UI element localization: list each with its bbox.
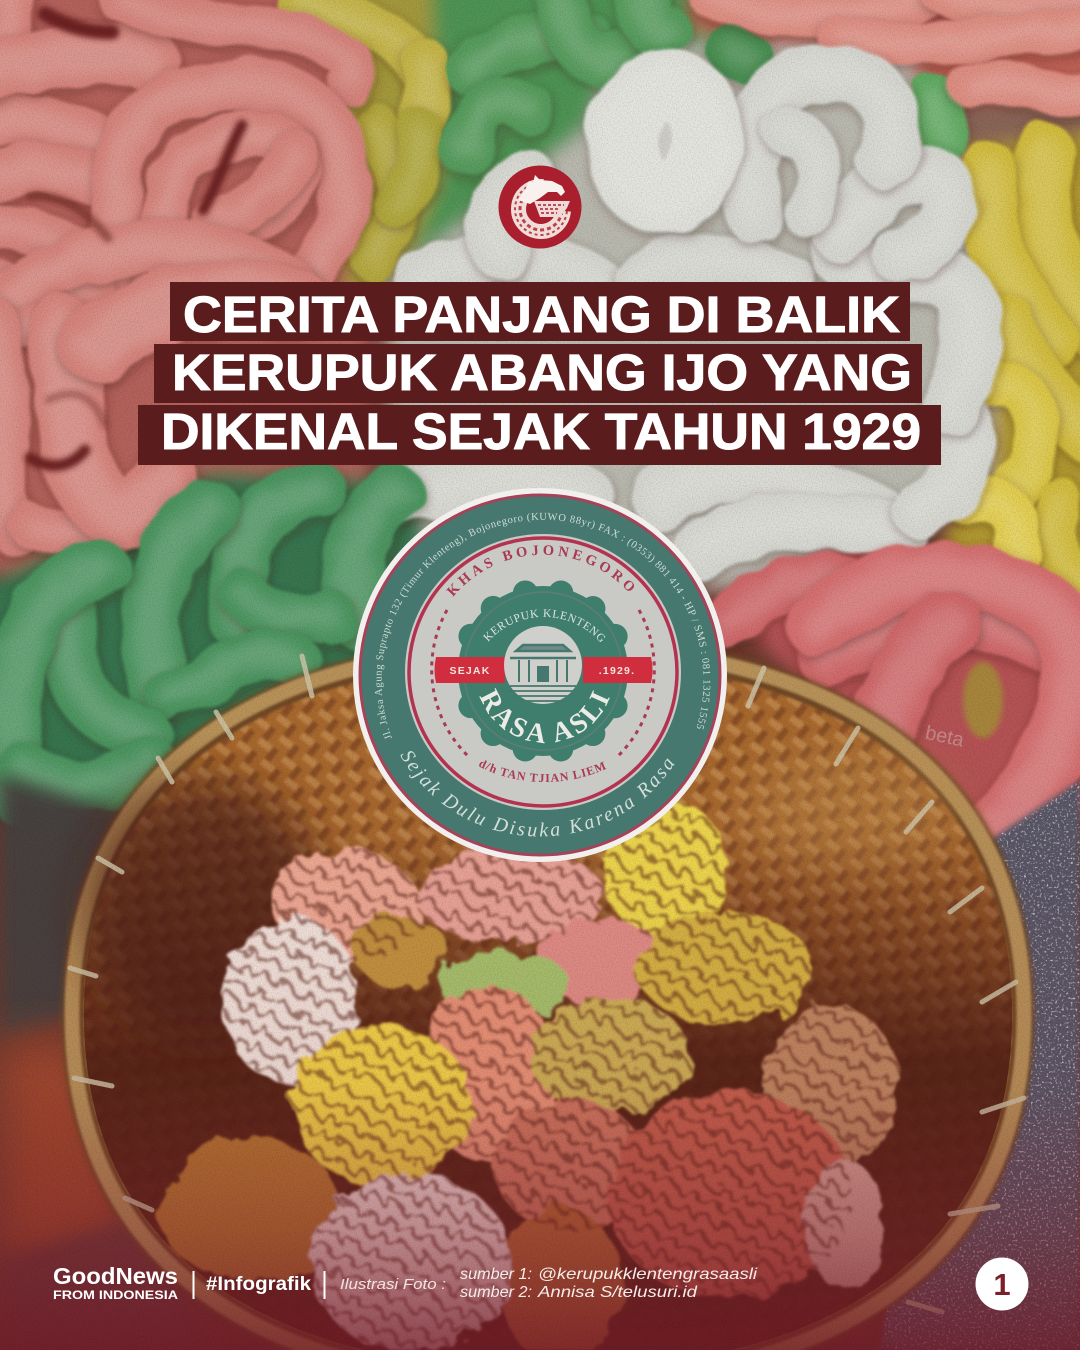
source lines (460, 1266, 758, 1301)
yellow crackers, right (960, 150, 1080, 585)
source lines: Annisa S/telusuri.id (537, 1284, 698, 1301)
hashtag with dividers (192, 1271, 326, 1299)
badge text: Khas Bojonegoro: KHAS BOJONEGORO (446, 545, 634, 597)
page number (976, 1258, 1028, 1310)
green crackers, lower left (11, 490, 395, 800)
title block (138, 282, 941, 465)
title line 1: CERITA PANJANG DI BALIK (183, 286, 900, 343)
photo credit label: Ilustrasi Foto : (340, 1276, 446, 1293)
white crackers, centre (400, 72, 973, 550)
red ribbon left: Sejak (434, 657, 505, 683)
source lines: @kerupukklentengrasaasli (538, 1266, 758, 1283)
temple illustration (504, 626, 582, 704)
title line 2: KERUPUK ABANG IJO YANG (172, 344, 912, 401)
pink crackers, top right (710, 0, 1080, 96)
round brand badge: Kerupuk Klenteng Rasa Asli (353, 488, 727, 862)
crackers inside basket (158, 798, 898, 1350)
bamboo basket (62, 636, 1034, 1350)
pink crackers, upper left (0, 0, 357, 533)
badge text: Rasa Asli: RASA ASLI (479, 688, 610, 744)
green crackers, top (465, 0, 945, 150)
dark creases in pink crackers (30, 14, 242, 466)
source lines: sumber 1: (460, 1266, 532, 1283)
footer credits (53, 1258, 1028, 1310)
source lines: sumber 2: (460, 1284, 532, 1301)
yellow crackers, upper middle (300, 5, 428, 260)
address ring text: Jl. Jaksa Agung Suprapto 132 (Timur Klenteng), Bojonegoro (KUWO 88yr) FAX : (0353) 881 414 - HP / SMS : 081 1325 1555 (374, 512, 710, 740)
pink cracker, right (730, 575, 1074, 825)
brand: GoodNews from Indonesia: GoodNews (53, 1263, 178, 1289)
vine ornaments (432, 610, 654, 757)
cracker watermark: beta (923, 722, 967, 752)
red ribbon right: 1929 (583, 657, 652, 683)
page number: 1 (993, 1267, 1011, 1302)
logo: red eagle G emblem (498, 166, 582, 248)
script slogan: Sejak Dulu Disuka Karena Rasa (400, 751, 674, 836)
brand: GoodNews from Indonesia (53, 1263, 178, 1302)
title line 3: DIKENAL SEJAK TAHUN 1929 (161, 403, 921, 460)
badge text: d/h Tan Tjian Liem: d/h TAN TJIAN LIEM (479, 760, 606, 782)
brand: GoodNews from Indonesia: FROM INDONESIA (53, 1288, 178, 1302)
underpainting of cracker colours (0, 0, 1080, 870)
scalloped green seal (458, 586, 628, 756)
hashtag with dividers: #Infografik (206, 1274, 311, 1295)
gap glimpse inside pink cracker (963, 662, 1003, 738)
cracker strand texture (222, 798, 898, 1350)
red ribbon right: 1929: .1929. (599, 665, 635, 677)
badge text: Kerupuk Klenteng: KERUPUK KLENTENG (482, 609, 606, 642)
red ribbon left: Sejak: SEJAK (449, 665, 491, 677)
grey surface, right and left (0, 775, 1080, 1350)
